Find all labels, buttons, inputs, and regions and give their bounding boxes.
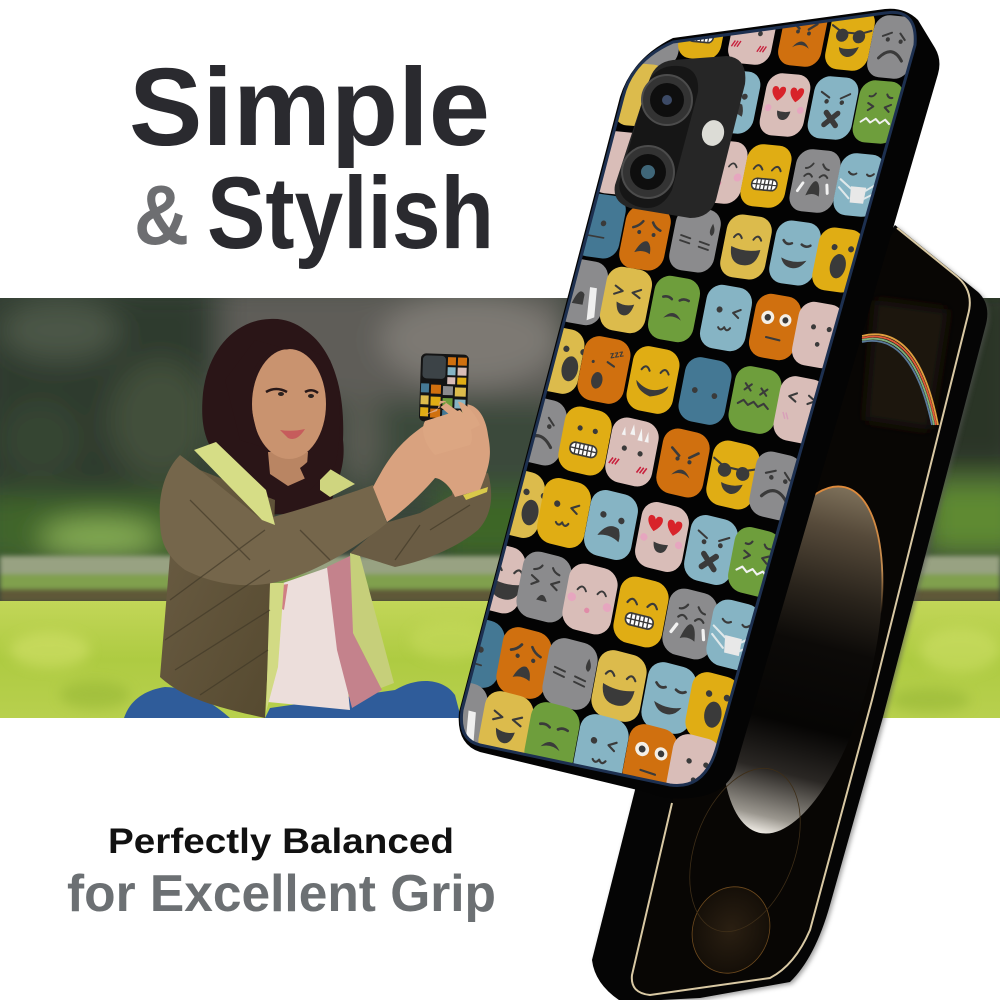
far arm sleeve	[350, 473, 491, 567]
watch band	[463, 487, 488, 500]
wallpaper upper glow	[865, 300, 948, 430]
jeans	[124, 681, 461, 718]
emoji row 4	[571, 192, 867, 294]
title: ampersand: &	[134, 168, 189, 262]
fingers	[423, 401, 480, 455]
camera module	[615, 56, 745, 218]
wallpaper lower shape	[679, 875, 783, 985]
emoji row 7	[528, 398, 797, 520]
emoji row 10	[470, 620, 734, 744]
subtitle: Perfectly Balanced: Perfectly Balanced	[108, 822, 454, 861]
neck	[268, 452, 308, 486]
phone shadow	[594, 227, 989, 1000]
emoji row 2	[612, 62, 906, 145]
case inner navy edge	[461, 12, 915, 786]
lower lens	[622, 146, 674, 198]
hands	[373, 404, 490, 522]
grass patches	[10, 620, 1000, 712]
face	[252, 349, 326, 459]
title: Stylish: Stylish	[207, 156, 494, 270]
back phone with gold rim	[592, 225, 989, 1000]
hair front left	[225, 340, 290, 447]
case body	[459, 9, 939, 798]
subtitle: for Excellent Grip: for Excellent Grip	[67, 865, 496, 923]
lining right	[350, 553, 394, 688]
hair back	[202, 319, 344, 515]
wallpaper rainbow arc	[862, 334, 938, 425]
phone screen wallpaper	[632, 228, 970, 995]
emoji row 9	[490, 546, 755, 670]
jacket quilting	[165, 500, 470, 695]
emoji row 11	[462, 683, 716, 784]
emoji row 5	[566, 259, 840, 368]
emoji row 6	[547, 328, 818, 444]
gold rim	[632, 228, 970, 995]
front phone case	[430, 0, 940, 809]
lining left	[266, 583, 284, 712]
wallpaper outline	[669, 753, 821, 947]
phone body	[592, 225, 987, 1000]
grass	[0, 601, 1000, 718]
emoji row 8	[510, 471, 776, 597]
plaid shirt left	[280, 584, 288, 610]
lens housing	[619, 66, 698, 208]
hair front right	[300, 350, 340, 490]
emoji grid	[462, 15, 914, 784]
flash	[699, 118, 727, 148]
jacket torso	[160, 470, 275, 718]
t-shirt	[268, 565, 350, 710]
wallpaper dome	[691, 470, 913, 850]
woman taking selfie	[124, 319, 491, 718]
emoji row 3	[590, 130, 887, 218]
title: Simple: Simple	[129, 46, 490, 169]
photo band: park background	[0, 285, 1000, 718]
collar	[194, 442, 275, 525]
near arm sleeve	[160, 455, 387, 585]
lawn path	[0, 556, 1000, 602]
collar right	[320, 463, 355, 497]
emoji row 1	[643, 15, 914, 79]
upper lens	[642, 75, 692, 125]
small phone with case	[419, 353, 469, 423]
plaid shirt	[327, 556, 382, 708]
eyes and mouth	[266, 389, 318, 439]
